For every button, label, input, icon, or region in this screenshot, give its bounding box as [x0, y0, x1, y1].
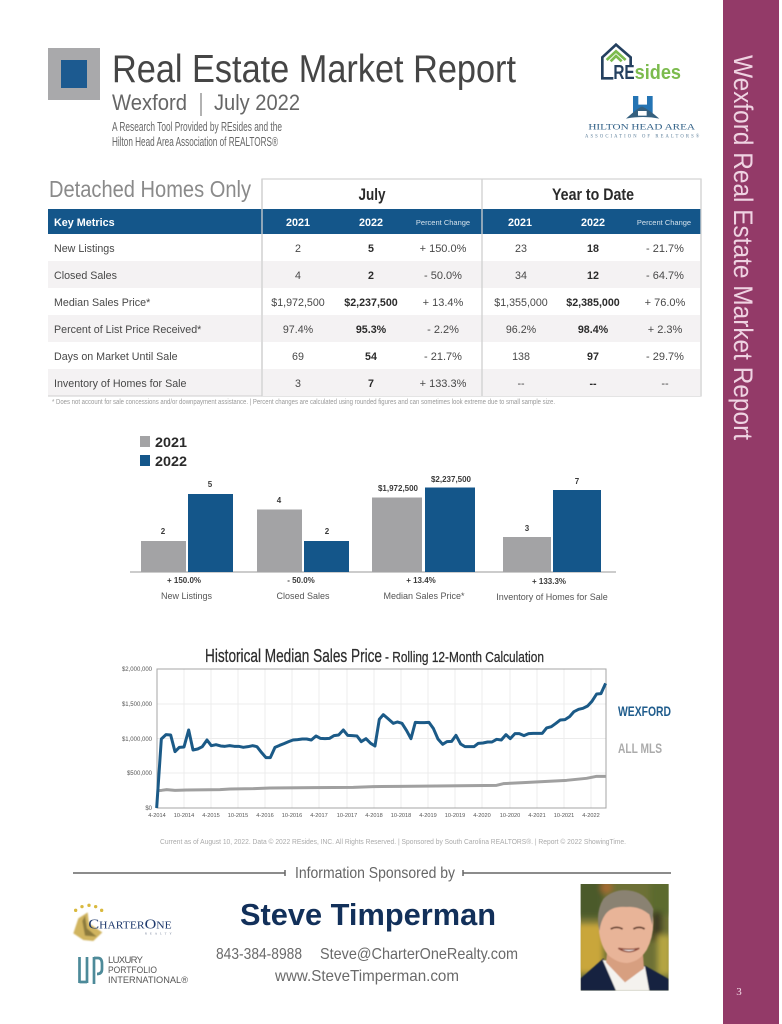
- portrait photo: [580, 884, 669, 991]
- x axis labels: 10-2018: [391, 813, 411, 819]
- title block: Real Estate Market Report: [112, 48, 516, 91]
- row: percent of list price: 95.3%: [356, 324, 387, 336]
- table header row: 2021: [508, 217, 532, 229]
- row: closed sales: - 64.7%: [646, 270, 684, 282]
- logo: REsides: RE: [613, 62, 635, 84]
- line chart: [122, 667, 606, 819]
- table header row: Percent Change: [637, 218, 691, 227]
- logo: Charter One: CHARTERONE: [88, 918, 172, 933]
- row: new listings: + 150.0%: [420, 243, 467, 255]
- table header row: 2022: [581, 217, 605, 229]
- row: percent of list price: 97.4%: [283, 324, 314, 336]
- subtitle: Wexford: [112, 90, 187, 115]
- bars: new listings: New Listings: [161, 591, 213, 601]
- x axis labels: 4-2018: [365, 813, 383, 819]
- row: new listings: 5: [368, 243, 374, 255]
- y axis labels: $1,000,000: [122, 737, 153, 743]
- bars: inventory: Inventory of Homes for Sale: [496, 592, 608, 602]
- table period headings: July: [358, 185, 386, 204]
- sponsor contact: Steve@CharterOneRealty.com: [320, 946, 518, 963]
- row: median sales price: Median Sales Price*: [54, 297, 150, 309]
- row: inventory: --: [661, 378, 669, 390]
- y axis labels: [122, 667, 153, 812]
- bar chart: [130, 475, 616, 602]
- sponsor name: Steve Timperman: [240, 897, 496, 932]
- x axis labels: 10-2017: [337, 813, 357, 819]
- bars: closed sales: [257, 496, 349, 601]
- row: percent of list price: + 2.3%: [648, 324, 682, 336]
- chart title: - Rolling 12-Month Calculation: [385, 650, 544, 666]
- row: new listings: New Listings: [54, 243, 115, 255]
- row: new listings: 2: [295, 243, 301, 255]
- x axis labels: 4-2021: [528, 813, 546, 819]
- data source note: Current as of August 10, 2022. Data © 2022 REsides, INC. All Rights Reserved. | Sponsored by South Carolina REALTORS®. | Report © 2022 ShowingTime.: [160, 837, 626, 846]
- table period headings: [358, 185, 634, 204]
- row: days on market: - 21.7%: [424, 351, 462, 363]
- row: closed sales: 4: [295, 270, 301, 282]
- provider text: A Research Tool Provided by REsides and the: [112, 120, 282, 134]
- row: days on market: - 29.7%: [646, 351, 684, 363]
- bars: new listings: 2: [161, 527, 166, 536]
- row: median sales price: $2,385,000: [566, 297, 620, 309]
- logo: REsides: [602, 45, 681, 84]
- subtitle: July 2022: [214, 90, 300, 115]
- legend: [140, 434, 187, 469]
- x axis labels: 4-2020: [473, 813, 491, 819]
- line: Wexford: [157, 683, 606, 808]
- x axis labels: 4-2017: [310, 813, 328, 819]
- x axis labels: 10-2014: [174, 813, 194, 819]
- bars: new listings: + 150.0%: [167, 576, 201, 585]
- sponsor contact: [216, 946, 518, 985]
- row: inventory: + 133.3%: [420, 378, 467, 390]
- row: closed sales: 12: [587, 270, 599, 282]
- bars: inventory: 3: [525, 524, 530, 533]
- series label: All MLS: ALL MLS: [618, 740, 662, 756]
- row: median sales price: $1,972,500: [271, 297, 325, 309]
- x axis labels: 10-2020: [500, 813, 520, 819]
- sponsor contact: www.SteveTimperman.com: [274, 968, 459, 985]
- bars: closed sales: Closed Sales: [276, 591, 330, 601]
- row: percent of list price: [54, 324, 682, 336]
- row: closed sales: - 50.0%: [424, 270, 462, 282]
- shirt and jacket: [581, 958, 669, 991]
- x axis labels: [148, 813, 600, 819]
- bars: inventory: + 133.3%: [532, 577, 566, 586]
- hair: [598, 890, 653, 931]
- legend: 2021: [155, 434, 187, 450]
- row: new listings: - 21.7%: [646, 243, 684, 255]
- row: inventory: Inventory of Homes for Sale: [54, 378, 187, 390]
- row: new listings: 18: [587, 243, 599, 255]
- row: percent of list price: - 2.2%: [427, 324, 459, 336]
- row: median sales price: + 13.4%: [423, 297, 464, 309]
- y axis labels: $2,000,000: [122, 667, 153, 673]
- logo: Luxury Portfolio International: [80, 955, 188, 986]
- provider text: [112, 120, 282, 149]
- provider text: Hilton Head Area Association of REALTORS®: [112, 135, 279, 149]
- row: days on market: 54: [365, 351, 377, 363]
- eyes and smile: [611, 927, 645, 929]
- x axis labels: 10-2021: [554, 813, 574, 819]
- row: days on market: [54, 351, 684, 363]
- row: new listings: 23: [515, 243, 527, 255]
- row: percent of list price: Percent of List Price Received*: [54, 324, 201, 336]
- row: percent of list price: 98.4%: [578, 324, 609, 336]
- y axis labels: $0: [145, 806, 153, 812]
- table header row: 2022: [359, 217, 383, 229]
- logo: Hilton Head Area: HILTON HEAD AREA: [588, 121, 696, 131]
- bars: median sales price: $2,237,500: [431, 475, 472, 484]
- page number: 3: [736, 986, 742, 998]
- footnote: * Does not account for sale concessions and/or downpayment assistance. | Percent changes are calculated using rounded figures and can sometimes look extreme due to small sample size.: [52, 399, 555, 406]
- bars: median sales price: + 13.4%: [406, 576, 436, 585]
- logo: REsides: sides: [635, 62, 681, 84]
- row: days on market: 138: [512, 351, 530, 363]
- x axis labels: 10-2015: [228, 813, 248, 819]
- x axis labels: 4-2014: [148, 813, 166, 819]
- row: median sales price: [54, 297, 686, 309]
- table header row: Key Metrics: [54, 217, 115, 229]
- bars: closed sales: - 50.0%: [287, 576, 315, 585]
- series label: Wexford: WEXFORD: [618, 703, 671, 719]
- x axis labels: 4-2015: [202, 813, 220, 819]
- row: median sales price: $1,355,000: [494, 297, 548, 309]
- row: days on market: 97: [587, 351, 599, 363]
- bars: new listings: 5: [208, 480, 213, 489]
- row: days on market: Days on Market Until Sale: [54, 351, 178, 363]
- neck and face: [606, 950, 644, 982]
- logo: Luxury Portfolio International: INTERNATIONAL®: [108, 975, 188, 986]
- panel: metrics table: [48, 179, 701, 396]
- logo: Hilton Head Area: [585, 96, 700, 139]
- row: inventory: 3: [295, 378, 301, 390]
- row: median sales price: + 76.0%: [645, 297, 686, 309]
- bars: closed sales: 4: [277, 496, 282, 505]
- sponsor heading: [73, 865, 671, 882]
- heading: detached homes: Detached Homes Only: [49, 176, 251, 202]
- x axis labels: 4-2016: [256, 813, 274, 819]
- table header row: 2021: [286, 217, 310, 229]
- logo: Charter One: [73, 904, 172, 941]
- bars: median sales price: [372, 475, 475, 601]
- row: percent of list price: 96.2%: [506, 324, 537, 336]
- bars: median sales price: $1,972,500: [378, 484, 419, 493]
- icon: header square: [48, 48, 100, 100]
- bars: inventory: [496, 477, 608, 602]
- legend: 2022: [155, 453, 187, 469]
- logo: Hilton Head Area: ASSOCIATION OF REALTORS®: [585, 133, 700, 139]
- chart title: Historical Median Sales Price: [205, 646, 382, 666]
- sidebar band: [723, 0, 779, 1024]
- logo: Luxury Portfolio International: PORTFOLIO: [108, 965, 157, 976]
- row: inventory: [54, 378, 669, 390]
- row: closed sales: Closed Sales: [54, 270, 117, 282]
- row: inventory: 7: [368, 378, 374, 390]
- x axis labels: 10-2019: [445, 813, 465, 819]
- bars: new listings: [141, 480, 233, 601]
- sidebar title: Wexford Real Estate Market Report: [728, 55, 758, 440]
- table header row: Percent Change: [416, 218, 470, 227]
- table header row: [54, 217, 691, 229]
- bars: inventory: 7: [575, 477, 580, 486]
- bars: closed sales: 2: [325, 527, 330, 536]
- sponsor contact: 843-384-8988: [216, 946, 302, 963]
- row: closed sales: 2: [368, 270, 374, 282]
- row: inventory: --: [589, 378, 597, 390]
- row: new listings: [54, 243, 684, 255]
- title block: [112, 48, 516, 149]
- row: median sales price: $2,237,500: [344, 297, 398, 309]
- row: days on market: 69: [292, 351, 304, 363]
- chart title: [205, 646, 544, 666]
- logo: Charter One: REALTY: [145, 932, 172, 936]
- logo: Luxury Portfolio International: LUXURY: [108, 955, 144, 966]
- subtitle: [112, 90, 300, 116]
- row: closed sales: [54, 270, 684, 282]
- row: inventory: --: [517, 378, 525, 390]
- x axis labels: 10-2016: [282, 813, 302, 819]
- sponsor heading: Information Sponsored by: [295, 865, 455, 882]
- line: all MLS: [157, 776, 606, 791]
- x axis labels: 4-2019: [419, 813, 437, 819]
- bars: median sales price: Median Sales Price*: [383, 591, 465, 601]
- row: closed sales: 34: [515, 270, 527, 282]
- y axis labels: $1,500,000: [122, 702, 153, 708]
- x axis labels: 4-2022: [582, 813, 600, 819]
- y axis labels: $500,000: [127, 771, 153, 777]
- table period headings: Year to Date: [552, 185, 634, 204]
